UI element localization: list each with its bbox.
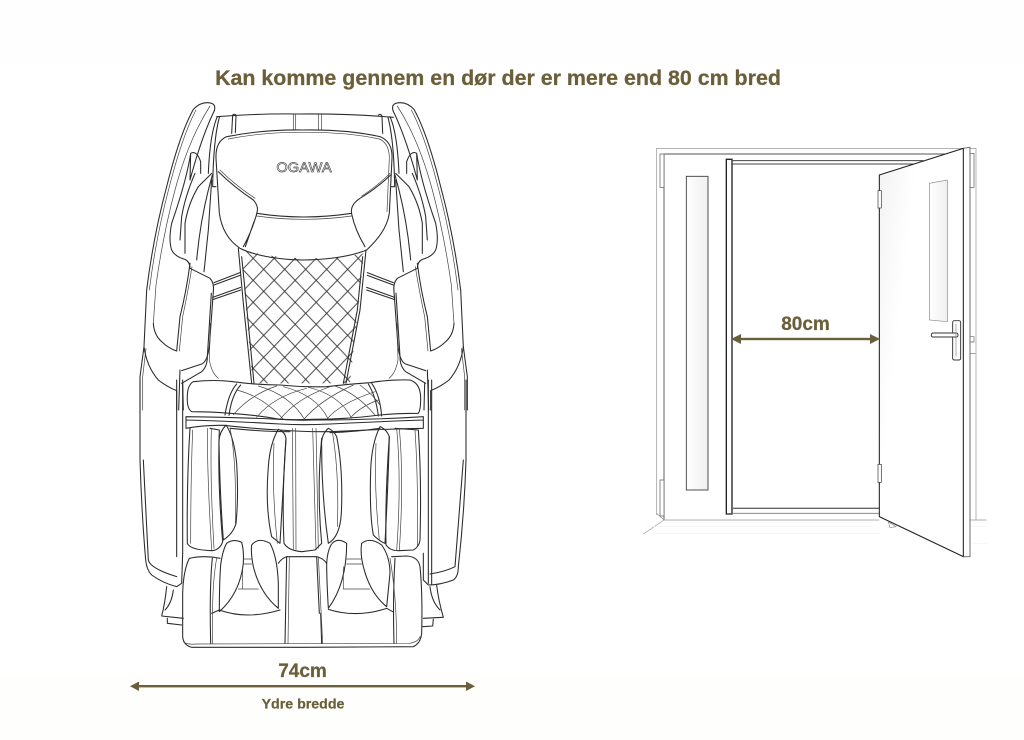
chair upper part: headrest, backrest and side wings [140,103,467,410]
door leaf [878,147,975,557]
top bar [217,114,393,133]
door opening [726,159,923,514]
left side wing [140,103,241,410]
dimension: chair width 74cm [130,661,475,712]
leg channels [187,425,421,552]
arrow [731,334,880,344]
chair lower part: seat cushion, leg channels and footrest [140,380,466,647]
logo: OGAWA [276,159,332,175]
foot cradles [212,540,393,615]
dimension: door width 80cm [731,314,880,344]
quilted mesh back panel [238,248,366,383]
seat cushion [186,380,423,433]
headrest [216,130,392,260]
label: 74cm: 74cm [278,661,327,682]
sidelight window [686,176,708,490]
floor lines [647,527,987,543]
footrest base [183,556,422,647]
door handle [931,321,961,360]
title: Kan komme gennem en dør der er mere end 80 cm bred [215,66,781,90]
illustration: open door [643,147,987,557]
label: outer width: Ydre bredde [262,696,344,712]
label: 80cm: 80cm [781,314,830,335]
right side wing [367,103,467,410]
illustration: massage chair [140,103,467,647]
side panels lower [140,380,466,627]
door frame [643,148,987,534]
arrow [130,682,475,691]
